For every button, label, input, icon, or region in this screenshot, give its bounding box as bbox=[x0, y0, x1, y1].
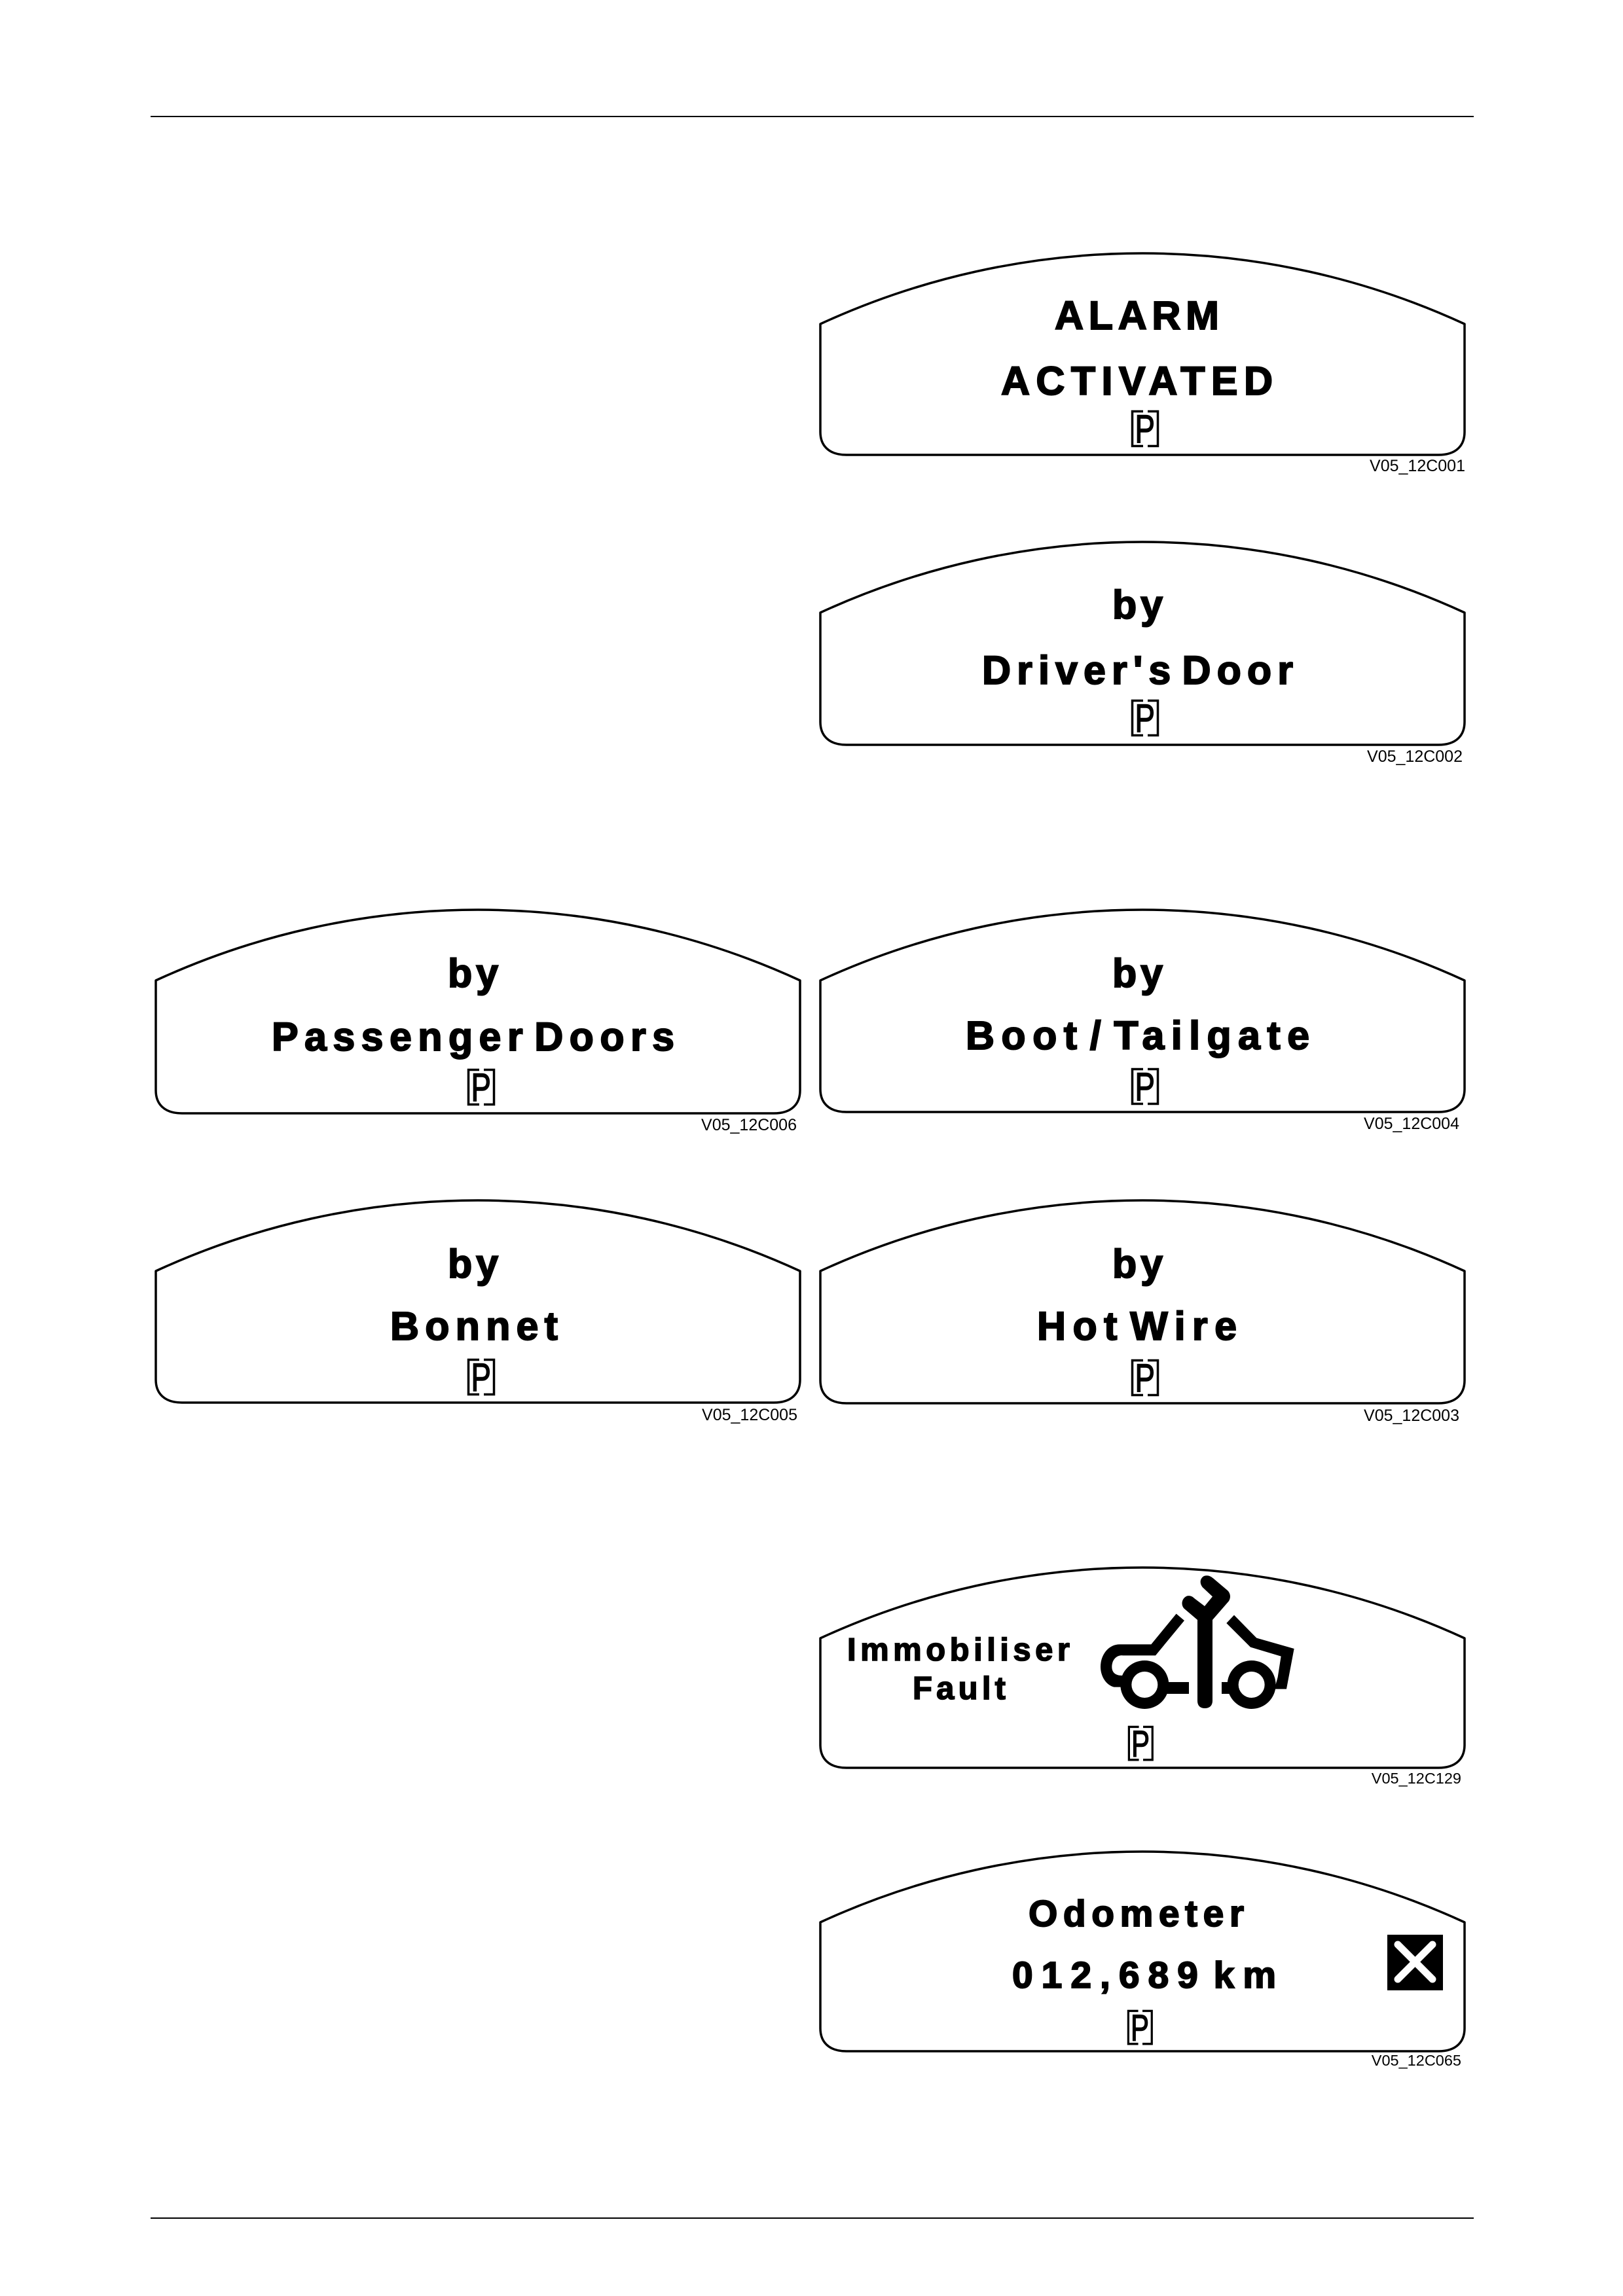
message: Odometer: Odometer bbox=[1029, 1893, 1244, 1935]
panel: by passenger doors bbox=[156, 910, 800, 1134]
figure code: V05_12C065 bbox=[1372, 2052, 1461, 2069]
figure code: V05_12C003 bbox=[1364, 1407, 1459, 1425]
icon: park indicator: P bbox=[1135, 408, 1155, 452]
figure code: V05_12C005 bbox=[702, 1406, 797, 1424]
panel: by bonnet bbox=[156, 1200, 800, 1424]
icon: park indicator: P bbox=[1135, 1066, 1155, 1109]
message: by: by bbox=[1112, 1242, 1163, 1286]
icon: park indicator: P bbox=[1131, 2007, 1149, 2049]
icon: park indicator: P bbox=[1131, 1723, 1150, 1765]
figure code: V05_12C002 bbox=[1367, 747, 1463, 766]
panel: by boot / tailgate bbox=[820, 910, 1465, 1133]
panel: by driver's door bbox=[820, 542, 1465, 766]
icon: crossed box bbox=[1387, 1935, 1443, 1990]
icon: car with spanner bbox=[1101, 1575, 1294, 1709]
message: Boot / Tailgate: Boot / Tailgate bbox=[966, 1013, 1309, 1058]
message: ACTIVATED: ACTIVATED bbox=[1001, 359, 1273, 403]
panel: by hot wire bbox=[820, 1200, 1465, 1425]
panel: alarm activated bbox=[820, 253, 1465, 475]
figure code: V05_12C001 bbox=[1370, 457, 1465, 475]
message: ALARM: ALARM bbox=[1055, 293, 1219, 338]
message: Hot Wire: Hot Wire bbox=[1037, 1304, 1237, 1348]
message: Fault: Fault bbox=[913, 1671, 1006, 1706]
figure code: V05_12C006 bbox=[701, 1116, 797, 1134]
figure code: V05_12C129 bbox=[1372, 1770, 1461, 1787]
message: by: by bbox=[448, 1242, 498, 1286]
message: Driver's Door: Driver's Door bbox=[982, 648, 1293, 692]
message: by: by bbox=[448, 951, 498, 996]
message: Immobiliser: Immobiliser bbox=[847, 1632, 1070, 1668]
panel: immobiliser fault bbox=[820, 1568, 1465, 1787]
message: 012,689 km: 012,689 km bbox=[1012, 1954, 1276, 1996]
message: by: by bbox=[1112, 951, 1163, 996]
panel: odometer bbox=[820, 1852, 1465, 2069]
icon: park indicator: P bbox=[1135, 697, 1155, 741]
icon: park indicator: P bbox=[471, 1356, 491, 1400]
header rule bbox=[151, 116, 1474, 117]
message: Passenger Doors: Passenger Doors bbox=[272, 1014, 674, 1059]
footer rule bbox=[151, 2217, 1474, 2219]
message: by: by bbox=[1112, 583, 1163, 627]
figure code: V05_12C004 bbox=[1364, 1115, 1459, 1133]
icon: park indicator: P bbox=[1135, 1357, 1155, 1401]
message: Bonnet: Bonnet bbox=[390, 1304, 558, 1348]
icon: park indicator: P bbox=[471, 1066, 491, 1110]
